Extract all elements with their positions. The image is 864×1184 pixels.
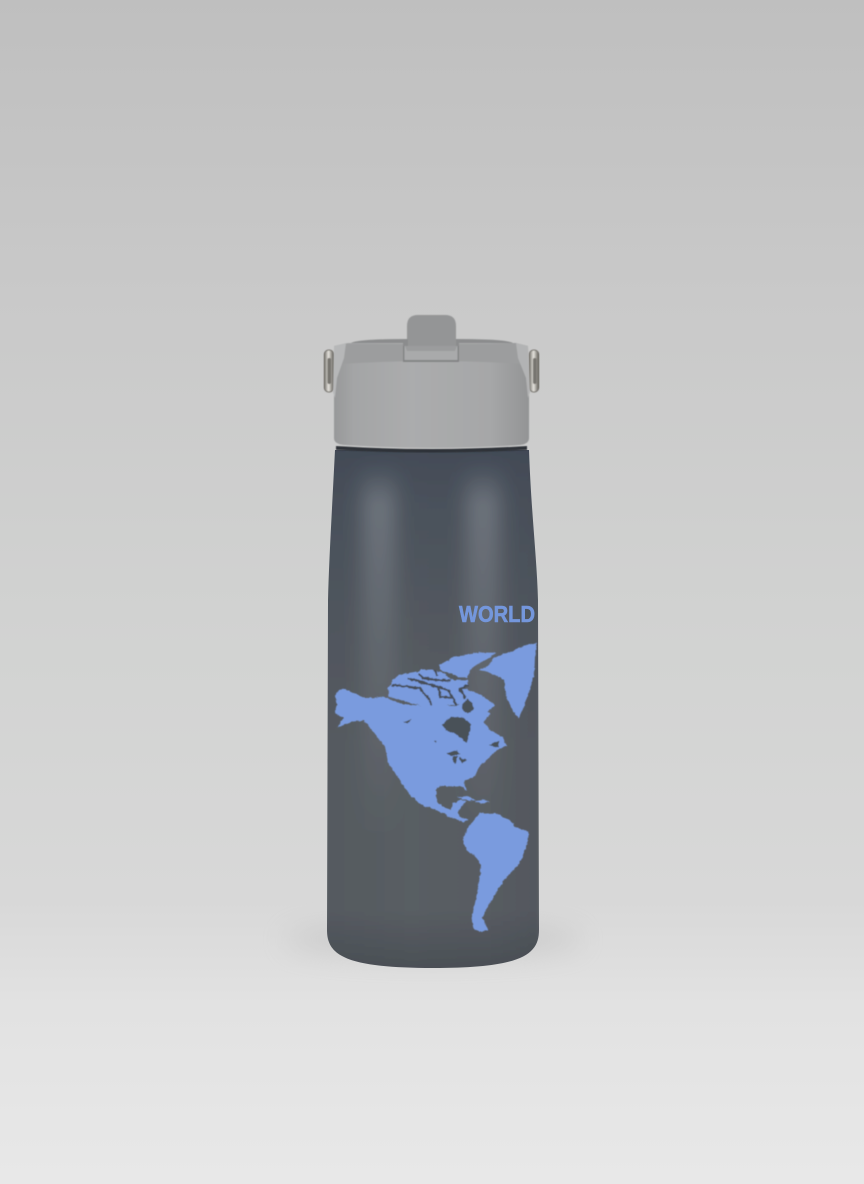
Great Lakes (404, 719, 500, 764)
Greenland (479, 643, 537, 718)
right ring (529, 350, 539, 392)
bottle shadow (283, 924, 583, 956)
Ellesmere Island (439, 653, 496, 677)
Hispaniola (475, 800, 490, 803)
cap main shell (334, 343, 529, 448)
upper collar shade (340, 344, 522, 364)
bottle body (320, 445, 545, 975)
left ring (324, 350, 334, 392)
Hudson Bay (442, 717, 471, 743)
pull tab (407, 315, 456, 348)
WORLD print: WORLD (459, 601, 535, 627)
notch (403, 346, 459, 362)
cap opening rim (350, 339, 514, 348)
lugs (333, 343, 346, 398)
cap (333, 315, 530, 448)
map of the Americas (335, 643, 537, 932)
Arctic channels (392, 670, 469, 705)
cap shadow line (336, 446, 527, 452)
North and Central America mainland (335, 688, 507, 822)
Foxe Basin (462, 698, 474, 713)
Arctic archipelago (388, 669, 495, 714)
Cuba (457, 796, 476, 801)
South America (463, 812, 528, 932)
